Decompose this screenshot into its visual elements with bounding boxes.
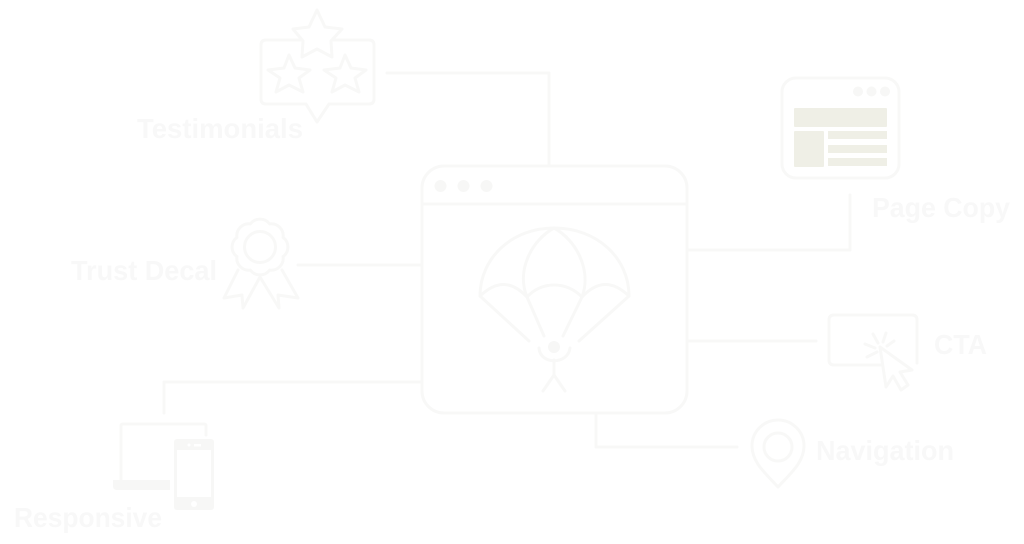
icon: page copy window: [782, 78, 899, 178]
page frame: [782, 78, 899, 178]
heading: CTA: CTA: [934, 329, 987, 360]
icon: testimonials speech bubble with stars: [261, 10, 374, 122]
icon: navigation map pin: [752, 420, 804, 487]
icon: responsive laptop and phone: [113, 424, 214, 510]
phone screen: [177, 450, 211, 497]
phone speaker: [188, 444, 201, 446]
page content blocks: [794, 108, 887, 167]
window header line: [422, 202, 687, 206]
heading: responsive: Responsive: [14, 502, 162, 533]
icon: parachute with figure: [480, 228, 629, 391]
heading: navigation: Navigation: [816, 435, 954, 466]
phone body: [174, 439, 214, 510]
heading: trust decal: Trust Decal: [71, 255, 217, 286]
heading: testimonials: Testimonials: [137, 113, 303, 144]
laptop outline: [121, 424, 206, 480]
icon: trust decal rosette: [224, 219, 298, 308]
heading: page copy: Page Copy: [872, 192, 1010, 223]
connector: navigation: [596, 414, 737, 447]
laptop base: [113, 480, 170, 490]
connector: testimonials: [387, 73, 549, 165]
panel: central browser window: [422, 166, 687, 413]
page dots: [853, 86, 890, 96]
connector: page copy: [688, 195, 850, 250]
phone home button: [191, 501, 197, 507]
connector: responsive: [164, 382, 422, 413]
connector: CTA: [688, 340, 816, 342]
icon: CTA button with cursor: [829, 315, 917, 390]
window dots: [434, 180, 492, 192]
window frame: [422, 166, 687, 413]
connector: trust decal: [298, 264, 421, 266]
